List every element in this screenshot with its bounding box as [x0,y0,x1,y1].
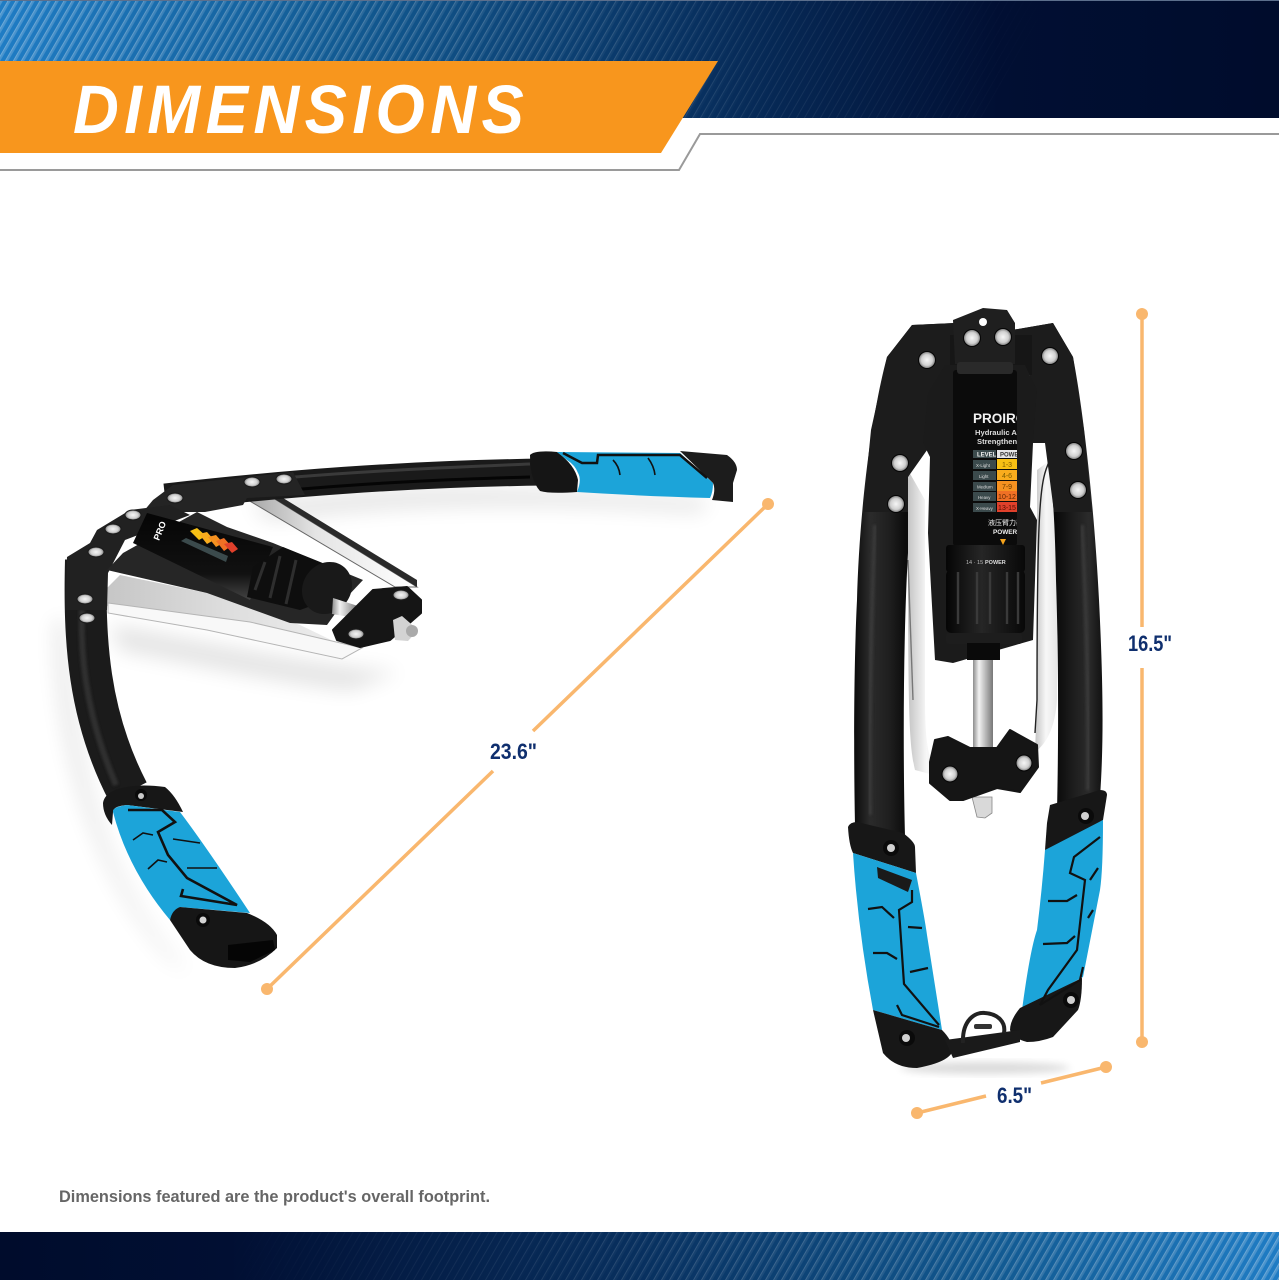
lower handle [103,786,277,968]
cylinder label text: POWER [993,529,1018,536]
cylinder label text: 1-3 [1002,462,1012,469]
cylinder label text: Hydraulic Arm [975,428,1027,437]
footer band with diagonal stripes [0,1232,1279,1280]
adjustment knob [247,547,347,610]
adjustment knob: POWER [985,560,1006,566]
left grip [848,822,953,1068]
soft shadows under product [55,489,710,975]
body plate [923,365,1037,663]
cylinder label text: X-Heavy [976,506,994,511]
cylinder label [152,520,238,562]
end clamp [930,730,1038,800]
hinge plates [143,472,305,512]
end clamp [333,587,421,647]
chrome side plates [908,470,945,778]
centre fill between plates [950,335,1032,375]
dimension: width 6.5 in [911,1061,1112,1119]
cylinder label text: Light [979,474,989,479]
end bolt [393,616,418,641]
title banner [0,61,718,153]
title text: DIMENSIONS [73,72,524,149]
cylinder label text: 4-6 [1002,473,1012,480]
product: angled side view [55,451,737,975]
label 16.5: 16.5" [1128,631,1172,656]
chrome lever plate upper [248,498,417,587]
cylinder label text: Strengthener [977,437,1024,446]
piston rod [332,598,358,618]
cylinder label text: LEVEL [977,452,997,458]
cylinder label text: X-Light [976,463,991,468]
label 6.5: 6.5" [997,1083,1032,1108]
cylinder label text: 液压臂力器 [988,518,1023,527]
label 23.6: 23.6" [490,739,537,764]
screws [888,328,1086,782]
hydraulic cylinder [953,370,1017,546]
cylinder label text: 13-15 [998,505,1016,512]
screws [77,474,409,639]
ground shadow [900,1062,1070,1074]
cylinder label text: POWER [1000,452,1023,458]
end bolt [972,797,992,818]
right arm [1012,323,1103,812]
hydraulic cylinder [133,513,273,600]
footnote: Dimensions featured are the product's overall footprint. [59,1187,490,1206]
chrome lever plate lower [107,575,352,650]
adjustment knob: 14 · 15 [966,560,983,566]
dimension: diagonal 23.6 in [261,498,774,995]
header white step and grey rule [0,118,1279,170]
cylinder label: PRO [152,520,168,542]
right grip [1010,790,1107,1042]
adjustment knob [946,545,1025,644]
piston rod [973,658,993,750]
lower arm [86,560,128,792]
cylinder label text: 7-9 [1002,484,1012,491]
upper arm [165,472,545,497]
top bracket [953,308,1015,364]
cylinder label text: Heavy [978,495,991,500]
product: front view [848,308,1107,1074]
bottom bridge with ring [945,1013,1020,1058]
cylinder label text: PROIRON [973,411,1036,426]
left arm [854,323,955,836]
header band with diagonal stripes [0,0,1279,118]
cylinder label text [973,414,1017,545]
cylinder label text: 10-12 [998,494,1016,501]
dimension: height 16.5 in [1128,308,1172,1048]
mounting plate under cylinder [107,512,363,625]
upper handle [530,451,737,502]
cylinder label text: Medium [977,484,993,490]
